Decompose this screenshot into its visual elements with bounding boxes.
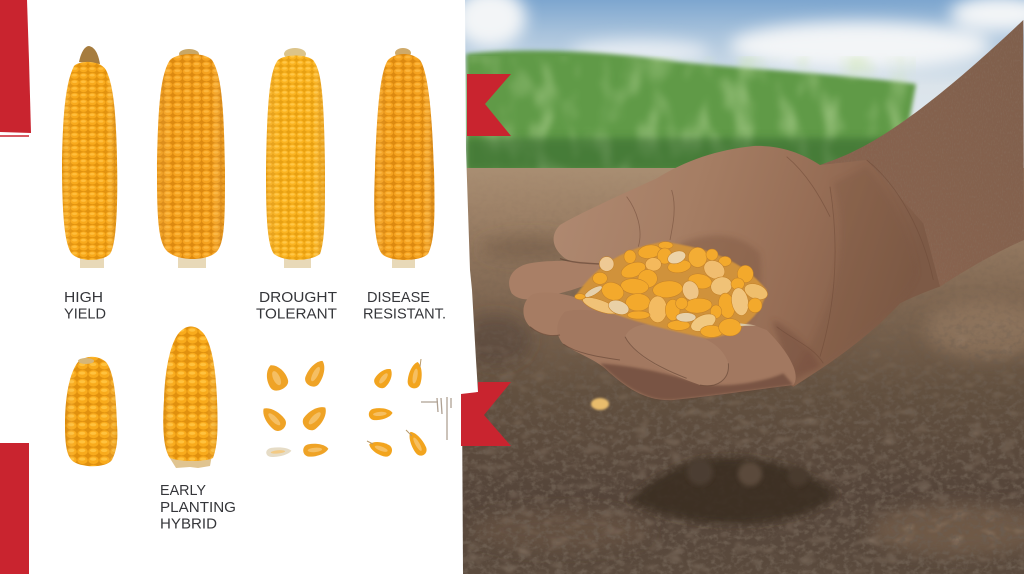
- finger: ring and lower hand: [557, 310, 796, 400]
- label: early planting hybrid: EARLY: [160, 482, 206, 499]
- corn cob: early planting hybrid: [163, 326, 218, 468]
- label: drought tolerant: TOLERANT: [256, 306, 337, 322]
- label: high yield: YIELD: [64, 306, 106, 322]
- dropped kernel on soil: [591, 398, 609, 410]
- red ribbon flag: top: [467, 74, 511, 136]
- label: drought tolerant: [256, 289, 337, 322]
- loose seeds: drought tolerant: [258, 357, 331, 458]
- finger: lower tip: [625, 324, 728, 386]
- label: disease resistant: [363, 289, 446, 322]
- label: drought tolerant: DROUGHT: [259, 289, 337, 306]
- palm and thumb: [554, 146, 940, 387]
- loose seeds: disease resistant: [367, 361, 429, 458]
- white upper panel: [0, 0, 478, 445]
- hand holding corn kernels: [509, 20, 1024, 400]
- cob tip: [179, 49, 199, 59]
- cob base: [168, 455, 212, 468]
- label: early planting hybrid: [160, 482, 236, 532]
- label: high yield: [64, 289, 106, 322]
- corn cob: third variety: [266, 48, 325, 268]
- seed tails: [367, 359, 421, 444]
- cob tip: [79, 46, 100, 64]
- green field: [466, 51, 916, 172]
- photo: corn field background: [454, 0, 1024, 574]
- finger tip shadows: [530, 327, 728, 386]
- cob tip: [284, 48, 306, 60]
- corn cob: short: [65, 357, 117, 466]
- paper tear mark: [421, 397, 451, 440]
- palm creases: [627, 157, 933, 363]
- cob stem: [284, 256, 311, 268]
- corn kernel pile: [575, 242, 770, 338]
- cob stem: [80, 256, 104, 268]
- kernels: [374, 54, 434, 260]
- label: disease resistant: RESISTANT.: [363, 306, 446, 322]
- soil ground: [459, 168, 1024, 574]
- kernel stem: [740, 323, 756, 326]
- red block: top left: [0, 0, 31, 133]
- finger: middle: [523, 292, 607, 336]
- kernels: [157, 54, 225, 259]
- kernels: [163, 326, 218, 461]
- kernels: [62, 62, 117, 260]
- cob husk top: [78, 358, 94, 364]
- clouds: [454, 0, 1024, 70]
- white lower panel: [28, 395, 463, 574]
- finger: index shadow: [560, 259, 600, 264]
- palm shading: [680, 167, 917, 385]
- red sliver under top block: [0, 135, 29, 137]
- cob stem: [178, 254, 206, 268]
- kernels: [65, 357, 117, 466]
- label: early planting hybrid: PLANTING: [160, 499, 236, 516]
- label: early planting hybrid: HYBRID: [160, 516, 217, 532]
- label: disease resistant: DISEASE: [367, 289, 430, 306]
- finger: index: [509, 261, 600, 299]
- soil mound: [628, 458, 838, 524]
- corn cob: disease resistant: [374, 48, 434, 268]
- red block: bottom left: [0, 443, 29, 574]
- arm: [800, 20, 1024, 307]
- corn cob: high yield: [62, 46, 117, 268]
- cob stem: [392, 256, 415, 268]
- cob tip: [395, 48, 411, 58]
- red ribbon flag: bottom: [461, 382, 511, 446]
- kernels: [266, 56, 325, 260]
- arm skin texture: [925, 24, 1024, 206]
- lower hand shadow: [600, 363, 793, 400]
- sky: [460, 0, 1024, 172]
- label: high yield: HIGH: [64, 289, 103, 306]
- corn cob: second variety: [157, 49, 225, 268]
